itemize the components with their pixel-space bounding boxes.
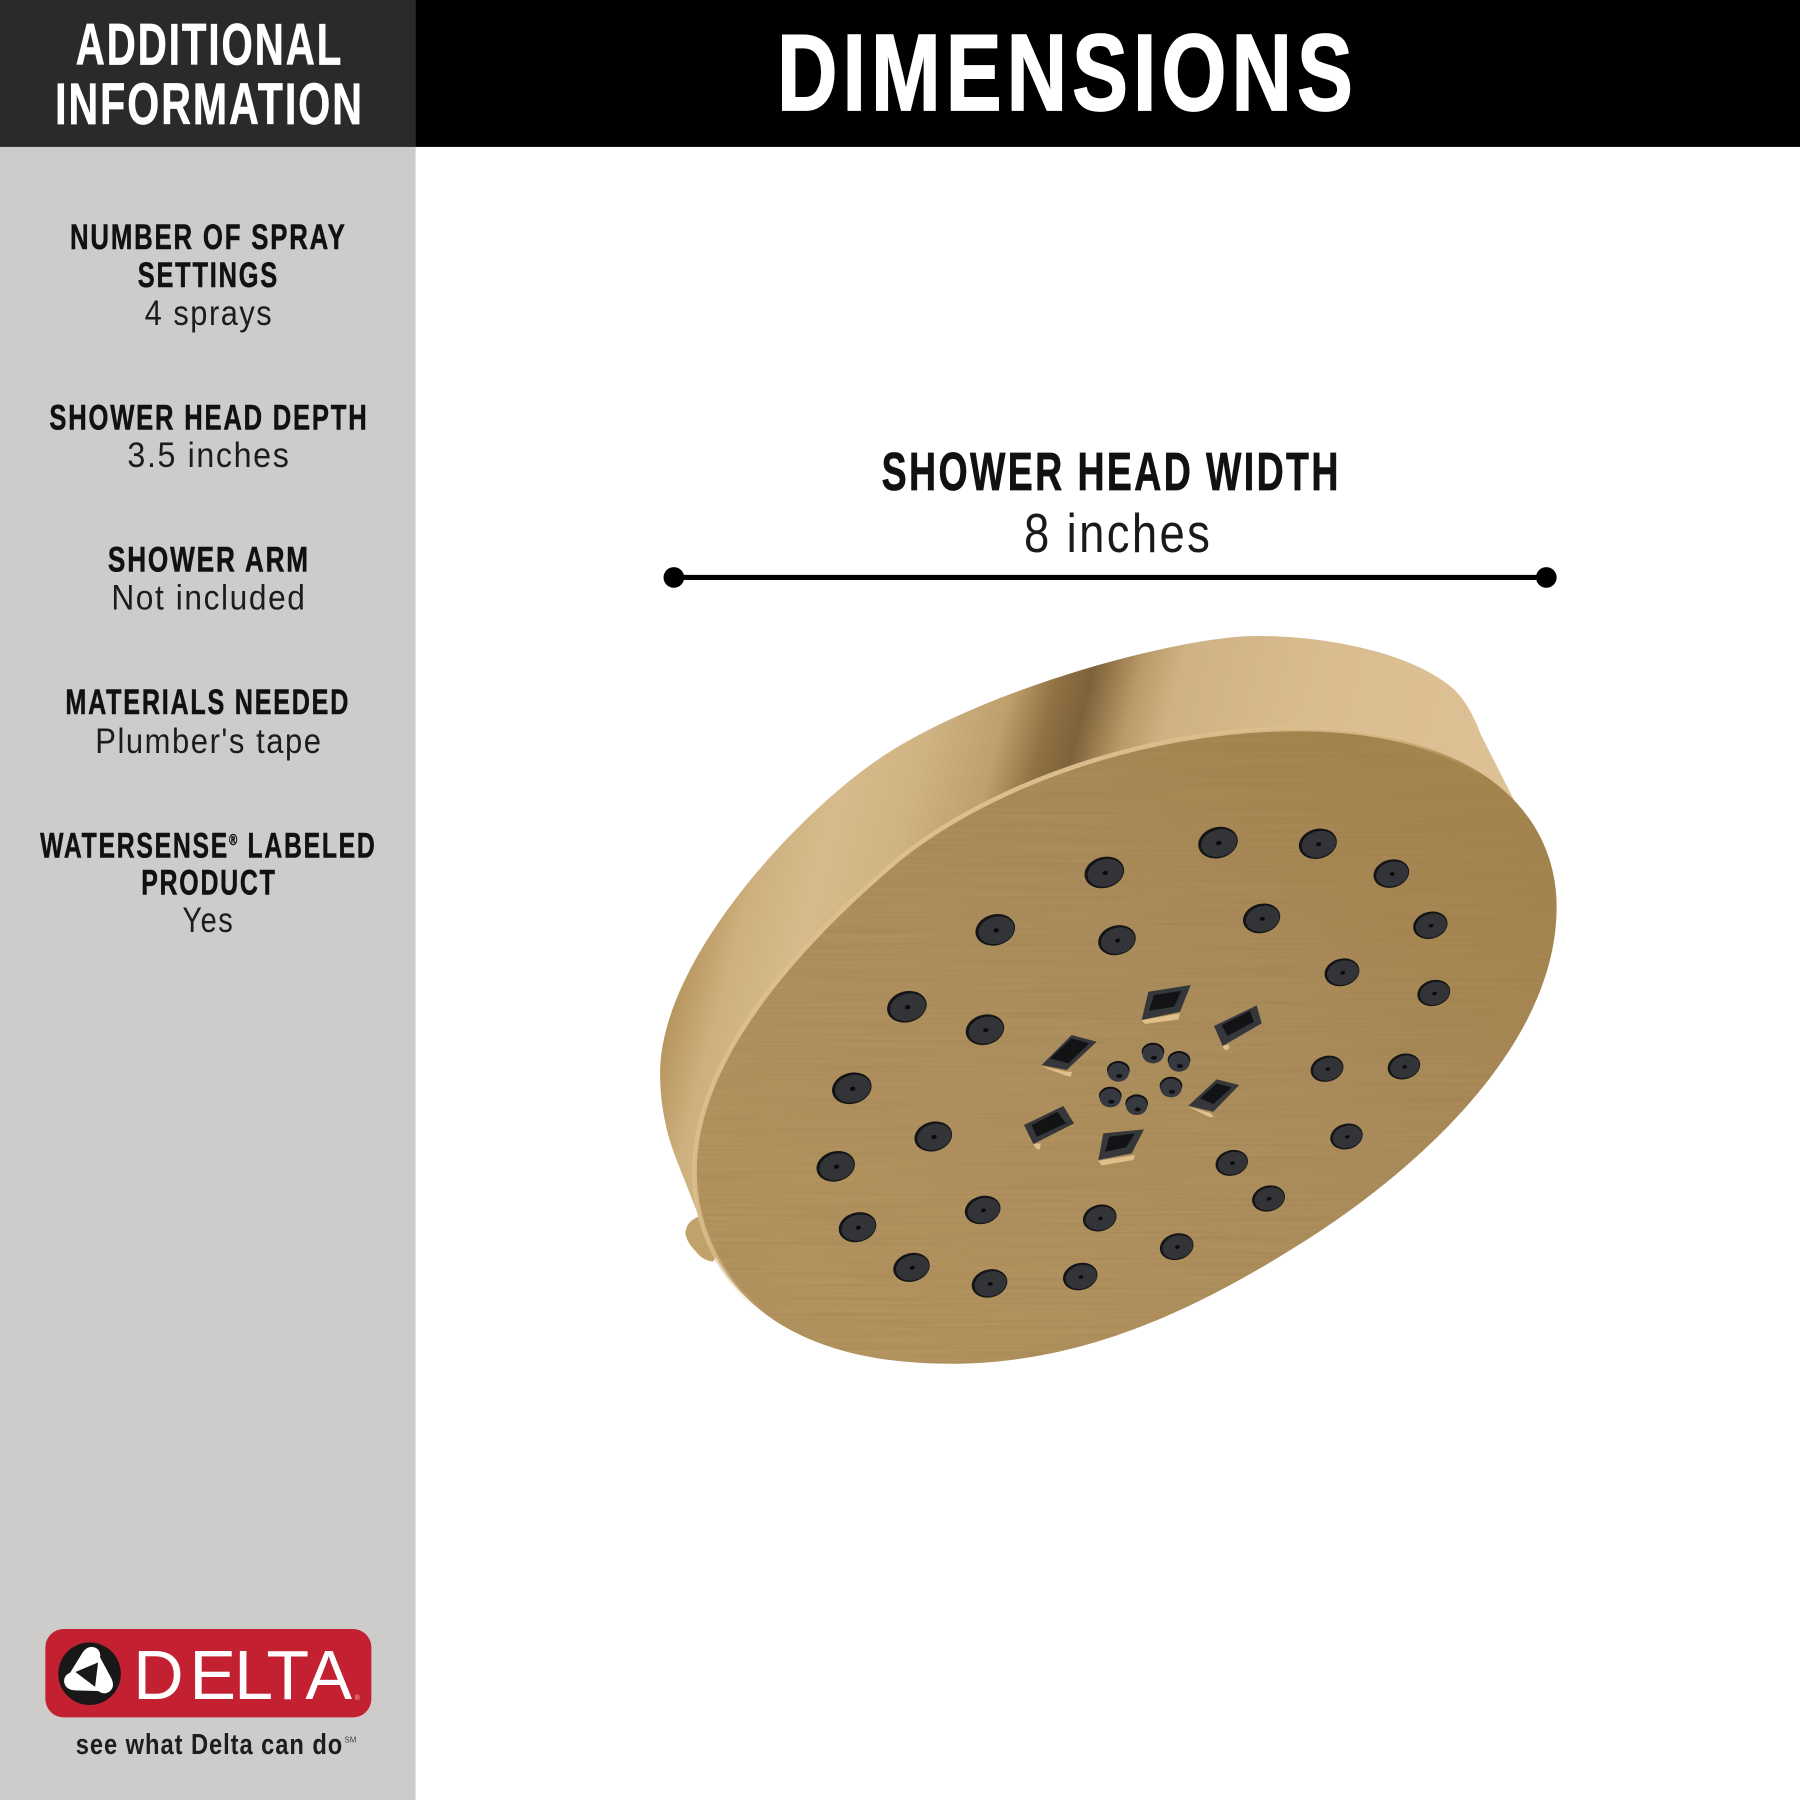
spec: shower head depth: SHOWER HEAD DEPTH bbox=[49, 397, 368, 437]
spec: shower arm: Not included bbox=[111, 578, 307, 618]
header bar: additional information: ADDITIONAL bbox=[76, 12, 343, 77]
spec: watersense labeled product: ® bbox=[229, 831, 239, 849]
spec: number of spray settings: SETTINGS bbox=[138, 255, 279, 295]
spray nozzles bbox=[813, 822, 1453, 1302]
wordmark: ® bbox=[355, 1694, 360, 1702]
label: shower head width: 8 inches bbox=[1024, 502, 1212, 564]
spec: shower head depth: 3.5 inches bbox=[127, 435, 290, 475]
panel: additional information sidebar bbox=[0, 147, 416, 1800]
label: shower head width: SHOWER HEAD WIDTH bbox=[882, 442, 1341, 502]
spec: materials needed: Plumber's tape bbox=[95, 721, 323, 761]
spec: materials needed: MATERIALS NEEDED bbox=[65, 682, 350, 722]
product: shower head bbox=[654, 636, 1573, 1378]
icon: Delta triangle mark bbox=[58, 1642, 123, 1705]
spec: number of spray settings bbox=[70, 217, 347, 333]
header bar: dimensions title: DIMENSIONS bbox=[777, 12, 1358, 134]
dimension line bbox=[664, 567, 1557, 588]
spec: watersense labeled product: Yes bbox=[183, 900, 234, 940]
spec: watersense labeled product: PRODUCT bbox=[141, 862, 277, 902]
tagline: SM bbox=[344, 1736, 357, 1745]
spec: watersense labeled product: WATERSENSE bbox=[40, 826, 312, 866]
header bar: additional information bbox=[0, 0, 416, 147]
logo: Delta bbox=[45, 1629, 371, 1761]
tagline: see what Delta can do bbox=[76, 1729, 343, 1761]
spec: number of spray settings: NUMBER OF SPRAY bbox=[70, 217, 347, 257]
label: shower head width bbox=[882, 442, 1341, 564]
spec: shower arm bbox=[108, 540, 310, 618]
spec: materials needed bbox=[65, 682, 350, 761]
wordmark: DELTA bbox=[133, 1636, 352, 1714]
center jets bbox=[1024, 985, 1262, 1165]
face plate bbox=[692, 729, 1557, 1364]
spec: shower head depth bbox=[49, 397, 368, 475]
spec: watersense labeled product: LABELED bbox=[239, 826, 377, 866]
header bar: dimensions title bbox=[416, 0, 1800, 147]
spec: number of spray settings: 4 sprays bbox=[145, 293, 273, 333]
rim body bbox=[660, 636, 1553, 1226]
spec: watersense labeled product bbox=[40, 826, 377, 940]
spec: shower arm: SHOWER ARM bbox=[108, 540, 310, 580]
header bar: additional information: INFORMATION bbox=[55, 72, 364, 137]
stem bbox=[685, 1217, 728, 1262]
